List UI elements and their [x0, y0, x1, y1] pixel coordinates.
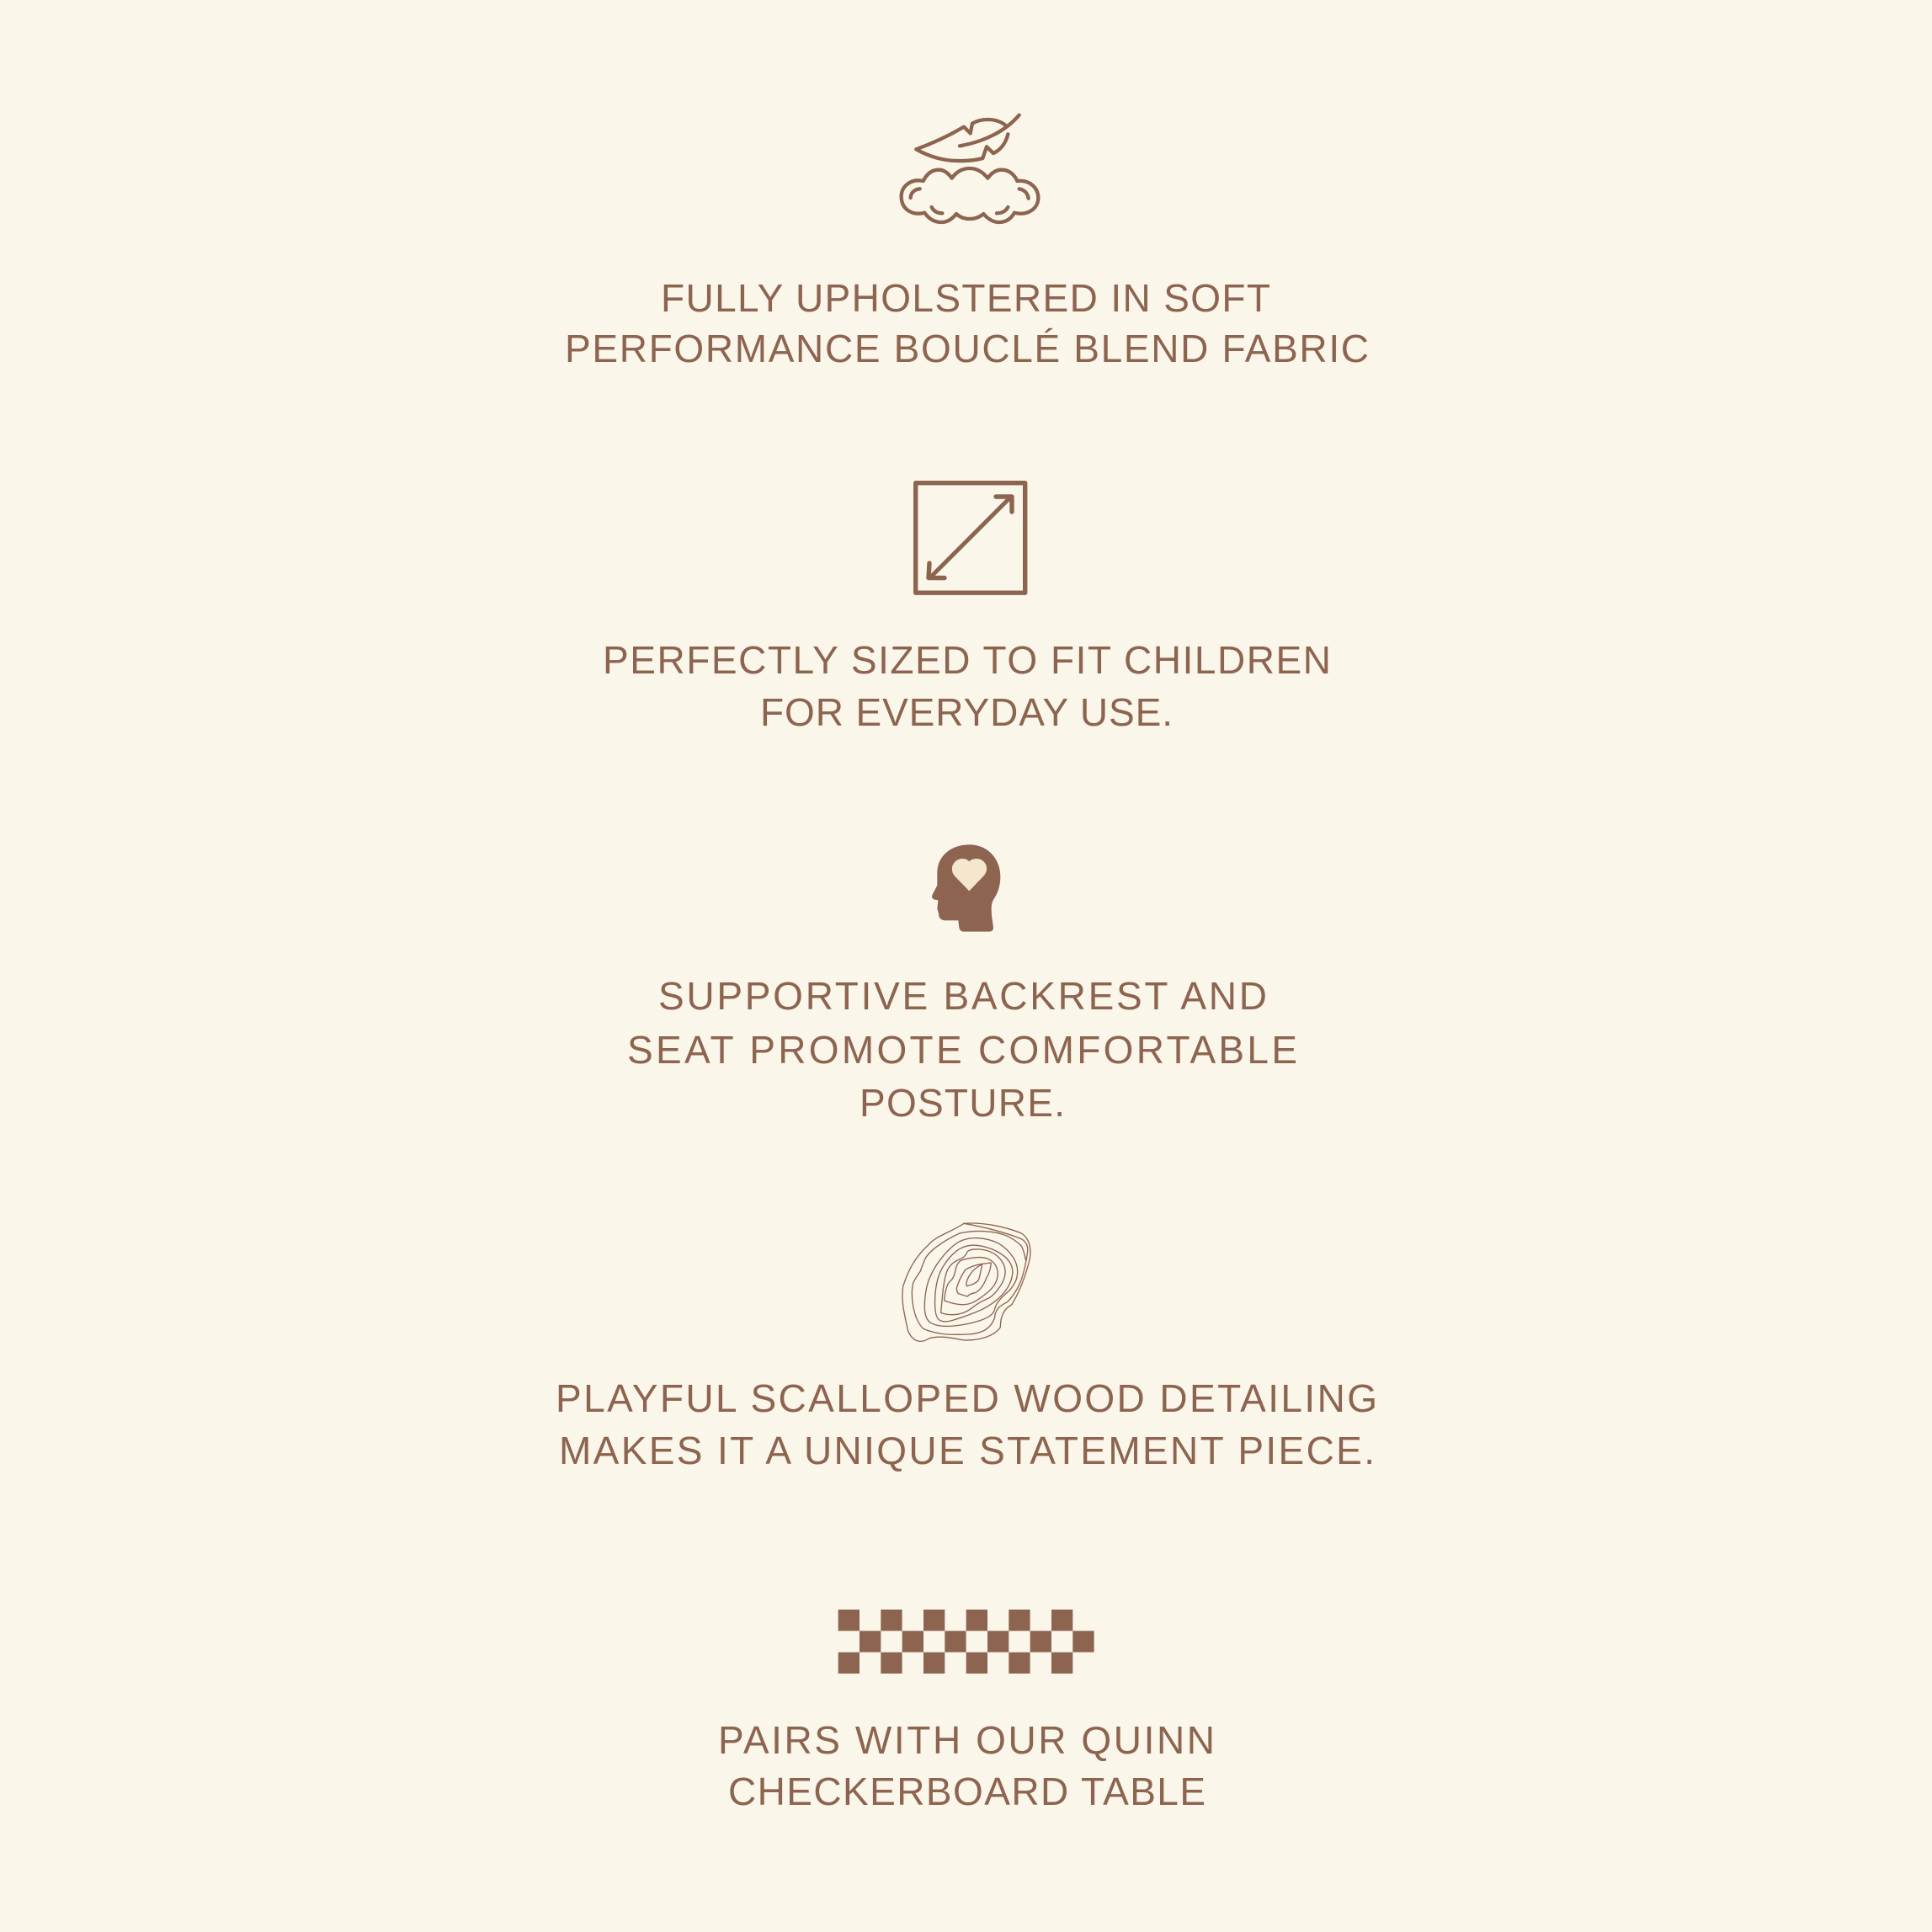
panel: soft boucle fabric — [565, 115, 1369, 370]
text: wood description: PLAYFUL SCALLOPED WOOD DETAILING — [556, 1376, 1377, 1420]
text: posture description: SUPPORTIVE BACKREST AND — [658, 974, 1267, 1018]
icon: checkerboard strip — [838, 1610, 1094, 1674]
text: table pairing description — [718, 1718, 1215, 1813]
icon: square with diagonal double arrow — [916, 483, 1025, 593]
text: table pairing description: CHECKERBOARD TABLE — [728, 1770, 1206, 1813]
text: table pairing description: PAIRS WITH OUR QUINN — [718, 1718, 1215, 1762]
text: fabric description: PERFORMANCE BOUCLÉ BLEND FABRIC — [565, 327, 1369, 370]
text: size description — [603, 638, 1331, 734]
panel: supportive posture — [627, 844, 1297, 1125]
text: fabric description — [565, 276, 1369, 370]
icon: head with heart — [932, 844, 1000, 932]
panel: scalloped wood — [556, 1223, 1377, 1472]
text: fabric description: FULLY UPHOLSTERED IN SOFT — [661, 276, 1270, 320]
icon: feather above cloud — [902, 115, 1038, 222]
panel: checkerboard table — [718, 1610, 1215, 1813]
text: wood description — [556, 1376, 1377, 1472]
icon: wood growth rings — [902, 1223, 1030, 1341]
text: size description: PERFECTLY SIZED TO FIT CHILDREN — [603, 638, 1331, 682]
text: posture description: POSTURE. — [860, 1081, 1065, 1125]
text: posture description — [627, 974, 1297, 1125]
text: wood description: MAKES IT A UNIQUE STATEMENT PIECE. — [559, 1429, 1375, 1472]
text: size description: FOR EVERYDAY USE. — [760, 690, 1173, 734]
text: posture description: SEAT PROMOTE COMFORTABLE — [627, 1028, 1297, 1072]
panel: sized for children — [603, 483, 1331, 734]
